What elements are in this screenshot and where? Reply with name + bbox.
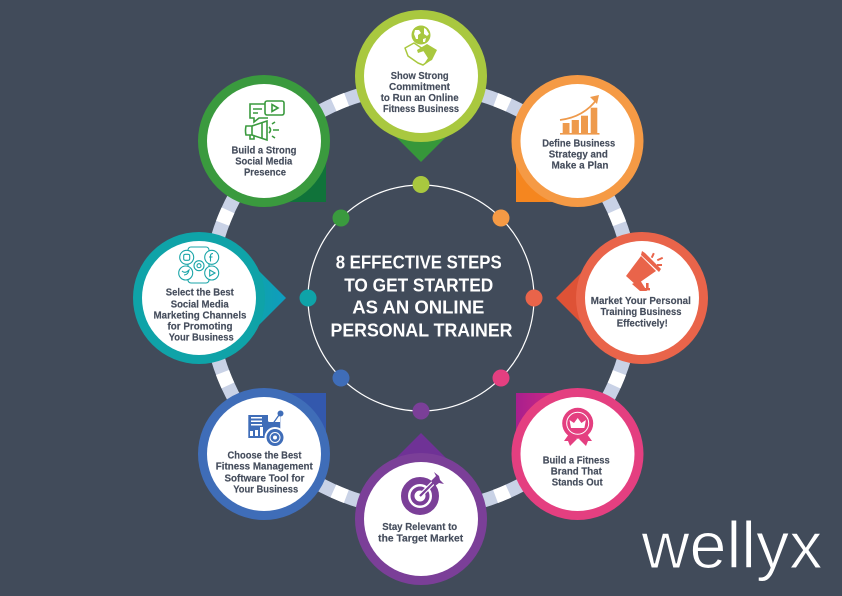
step text	[543, 455, 610, 488]
step text	[216, 450, 313, 495]
step text: Choose the Best	[228, 450, 302, 461]
step text: Make a Plan	[552, 161, 608, 172]
step text: Commitment	[389, 82, 451, 93]
step text: the Target Market	[378, 534, 464, 545]
step text: Effectively!	[617, 319, 668, 330]
panel: step select social channels	[133, 232, 286, 364]
panel: step choose software tool	[198, 388, 330, 520]
step text: Presence	[244, 167, 286, 178]
step text: Marketing Channels	[154, 310, 247, 321]
title: 8 EFFECTIVE STEPS	[336, 251, 502, 272]
step text: Select the Best	[166, 288, 234, 299]
icon: megaphone	[626, 251, 663, 291]
panel: step build a fitness brand	[512, 388, 644, 520]
step text: for Promoting	[168, 321, 232, 332]
step text: Fitness Management	[216, 461, 313, 472]
icon: target with arrow	[404, 472, 444, 512]
step text: Build a Strong	[232, 145, 296, 156]
step text: to Run an Online	[381, 93, 459, 104]
step text: Brand That	[551, 466, 602, 477]
step text: Stay Relevant to	[382, 522, 457, 533]
step text	[591, 296, 691, 330]
step text	[381, 71, 459, 115]
panel: step define business strategy	[512, 75, 644, 207]
icon: megaphone with chat and video bubbles	[246, 101, 284, 140]
step text	[154, 288, 247, 344]
title: TO GET STARTED	[344, 274, 493, 295]
step text: Fitness Business	[383, 104, 459, 115]
step text: Define Business	[542, 139, 616, 150]
step text: Stands Out	[552, 477, 603, 488]
icon: analytics dashboard with gear	[248, 410, 286, 448]
step text: Build a Fitness	[543, 455, 610, 466]
title: AS AN ONLINE	[352, 297, 484, 318]
outer dashed ring connecting the steps	[209, 86, 633, 510]
step text: Market Your Personal	[591, 296, 691, 307]
step text: Training Business	[600, 307, 682, 318]
step text: Show Strong	[391, 71, 449, 82]
panel: step build social media presence	[198, 75, 330, 207]
step text: Software Tool for	[224, 473, 305, 484]
panel: step market your business	[556, 232, 708, 364]
step text: Your Business	[233, 484, 299, 495]
title: PERSONAL TRAINER	[330, 320, 512, 341]
icon: rising bar chart	[560, 95, 600, 135]
panel: step stay relevant	[355, 433, 487, 585]
step text: Strategy and	[549, 150, 608, 161]
inner circle with step dots	[300, 176, 542, 420]
icon: globe and handshake	[405, 26, 437, 65]
step text: Your Business	[169, 333, 234, 344]
step text: Social Media	[171, 299, 229, 310]
title	[330, 251, 512, 341]
logo: wellyx: wellyx	[640, 508, 822, 582]
step text	[542, 139, 616, 172]
step text	[378, 522, 464, 545]
panel: step show strong commitment	[355, 10, 487, 162]
step text	[232, 145, 296, 178]
icon: award ribbon	[562, 408, 593, 446]
icon: phone with social media badges	[179, 247, 219, 283]
step text: Social Media	[235, 156, 293, 167]
